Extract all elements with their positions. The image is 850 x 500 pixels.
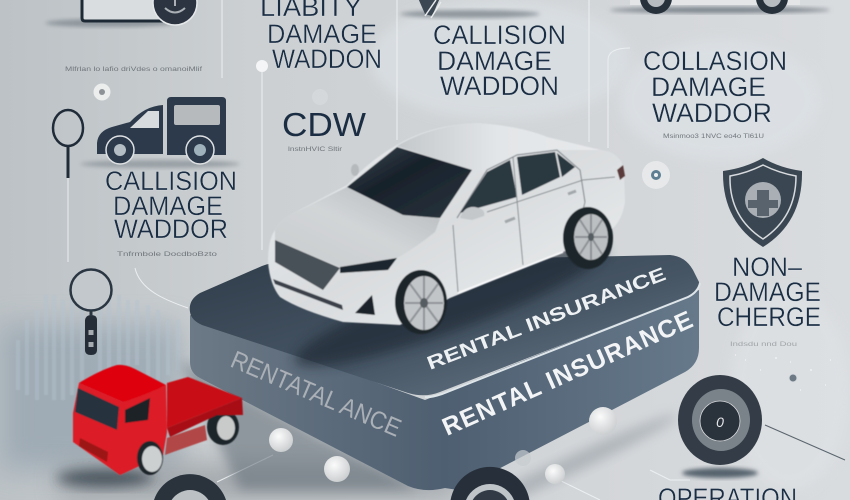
truck windshield [75,388,119,430]
caption below non-damage: Indsdu nnd Dou [730,341,798,348]
pale dot [312,89,328,105]
side windows [460,152,575,213]
decorative knob right [642,161,670,189]
tail light [617,165,625,180]
icon: van [80,97,240,168]
truck skirt [165,425,207,455]
grille [275,240,340,290]
heading: callision damage waddor: CALLISION [105,166,237,196]
heading: callision damage waddon right [433,20,566,101]
small caption top-left: Mlfrlan lo lafio driVdes o omanoiMlif [65,66,202,73]
truck bed edge [167,398,243,437]
label: rental insurance front: RENTAL INSURANCE [438,305,698,441]
icon: shield [723,158,802,247]
icon: top-left device with dial [45,0,197,27]
car [268,123,625,334]
wheel: bottom centre [451,467,529,500]
decorative vertical stripes [18,295,178,400]
truck rear wheel [207,409,239,445]
heading: collasion damage waddor: DAMAGE [651,72,766,102]
platform top surface [190,255,699,395]
heading: liability damage waddon [260,0,382,74]
truck cab front [73,383,167,475]
sill highlight [458,252,563,293]
fog lamp [355,295,375,315]
heading: non-damage charge: CHERGE [717,302,821,332]
door lines [453,157,615,292]
heading: collasion damage waddor: COLLASION [643,46,787,76]
heading: callision damage waddor: WADDOR [114,214,228,244]
icon: magnifier [70,270,112,355]
heading: non-damage charge: DAMAGE [714,277,821,307]
mirror [460,207,484,220]
rear wheel [563,207,613,269]
heading: collasion damage waddor [643,46,787,128]
windshield [347,147,472,218]
headlight strip [340,258,397,273]
heading: callision damage waddor: DAMAGE [113,191,223,221]
platform highlight edge [425,283,700,397]
speckles and small dot [735,355,831,390]
truck front grille [79,438,108,462]
truck side window [125,398,150,423]
heading: CDW: CDW [282,106,367,143]
platform side [190,290,699,490]
caption below callision: Tnfrmbole DocdboBzto [117,251,218,258]
heading: callision damage waddor [105,166,237,244]
CDW caption: lnstnHVIC Sltir [288,146,343,153]
wheel: right with dial: 0 [716,414,724,430]
icon: loop pin [53,110,83,178]
heading: non-damage charge [714,252,821,332]
truck cab roof [79,365,166,402]
car body [268,123,625,325]
balls [269,407,617,484]
door handles [505,191,576,222]
truck front wheel [137,441,163,475]
heading: callision damage waddon right: WADDON [440,71,559,101]
front wheel [395,270,447,334]
car roof [397,123,600,172]
car hood [275,187,440,267]
red truck [57,365,243,487]
caption below collasion: Msinmoo3 1NVC eo4o Tl61U [663,133,764,140]
top-centre cropped icon and shadow [400,0,540,18]
heading: non-damage charge: NON– [732,252,802,282]
wheel: bottom left [154,474,226,500]
heading: collasion damage waddor: WADDOR [652,98,772,128]
engraved label: RENTATAL ANCE [227,346,405,443]
heading: liability damage waddon: WADDON [272,44,382,74]
dot [256,60,268,72]
top-right cropped car wheels [610,0,830,14]
window frame [457,150,585,218]
heading: callision damage waddon right: CALLISION [433,20,566,50]
far mirror [351,164,359,176]
heading: liability damage waddon: DAMAGE [267,19,377,49]
decorative knob [94,84,110,100]
label: rental insurance top: RENTAL INSURANCE [424,264,669,375]
truck bed top [167,377,242,428]
lower bumper [273,279,343,310]
wheel: right with dial [678,375,762,478]
heading: callision damage waddon right: DAMAGE [437,46,552,76]
platform [180,224,700,500]
